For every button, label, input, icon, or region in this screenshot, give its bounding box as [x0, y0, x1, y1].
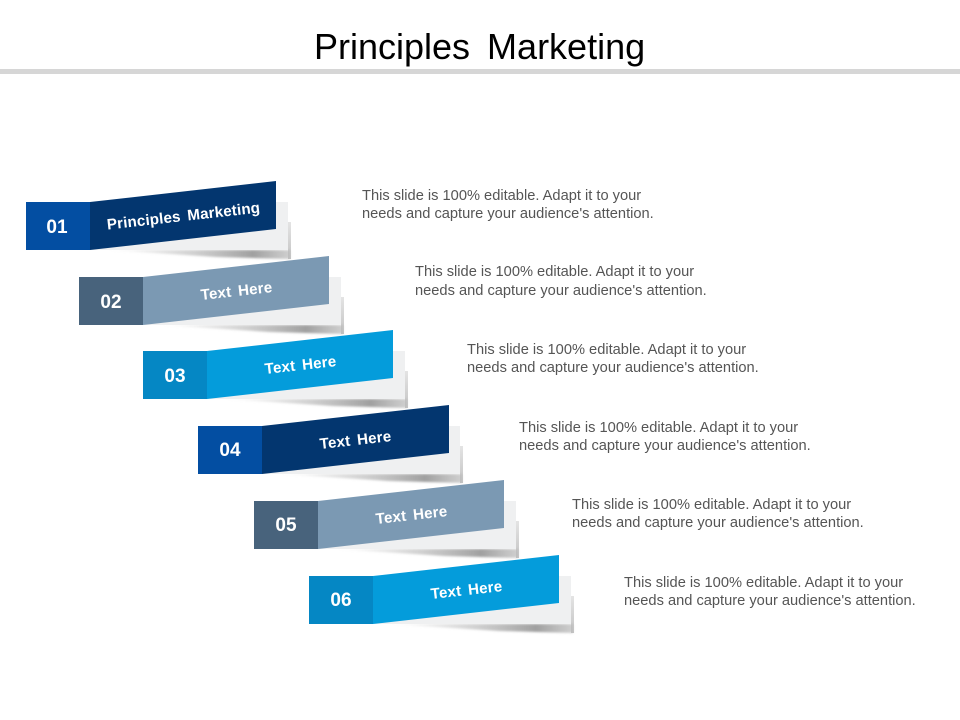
description 02: needs and capture your audience's attention. — [415, 283, 707, 299]
description 01: needs and capture your audience's attention. — [362, 206, 654, 222]
step 02: 02 — [100, 292, 122, 313]
title rule — [0, 69, 960, 74]
description 03: needs and capture your audience's attention. — [467, 360, 759, 376]
step 06: Text Here — [430, 578, 503, 603]
step 03 — [143, 330, 408, 408]
step 04 — [198, 405, 463, 483]
description 03: This slide is 100% editable. Adapt it to your — [467, 342, 746, 358]
title: Principles Marketing — [314, 26, 645, 67]
step 02: Text Here — [200, 279, 273, 304]
step 04: 04 — [219, 440, 241, 461]
description 01: This slide is 100% editable. Adapt it to your — [362, 188, 641, 204]
step 06 — [309, 555, 574, 633]
description 05: This slide is 100% editable. Adapt it to your — [572, 497, 851, 513]
step 05: Text Here — [375, 503, 448, 528]
description 04: needs and capture your audience's attention. — [519, 438, 811, 454]
description 05: needs and capture your audience's attention. — [572, 515, 864, 531]
step 05 — [254, 480, 519, 558]
step 01: Principles Marketing — [106, 199, 261, 234]
step 03: Text Here — [264, 353, 337, 378]
step 05: 05 — [275, 515, 297, 536]
description 06: This slide is 100% editable. Adapt it to your — [624, 575, 903, 591]
step 02 — [79, 256, 344, 334]
step 01 — [26, 181, 291, 259]
step 06: 06 — [330, 590, 352, 611]
description 02: This slide is 100% editable. Adapt it to your — [415, 264, 694, 280]
step 01: 01 — [46, 217, 68, 238]
step 04: Text Here — [319, 428, 392, 453]
description 04: This slide is 100% editable. Adapt it to your — [519, 420, 798, 436]
step 03: 03 — [164, 366, 186, 387]
description 06: needs and capture your audience's attention. — [624, 593, 916, 609]
